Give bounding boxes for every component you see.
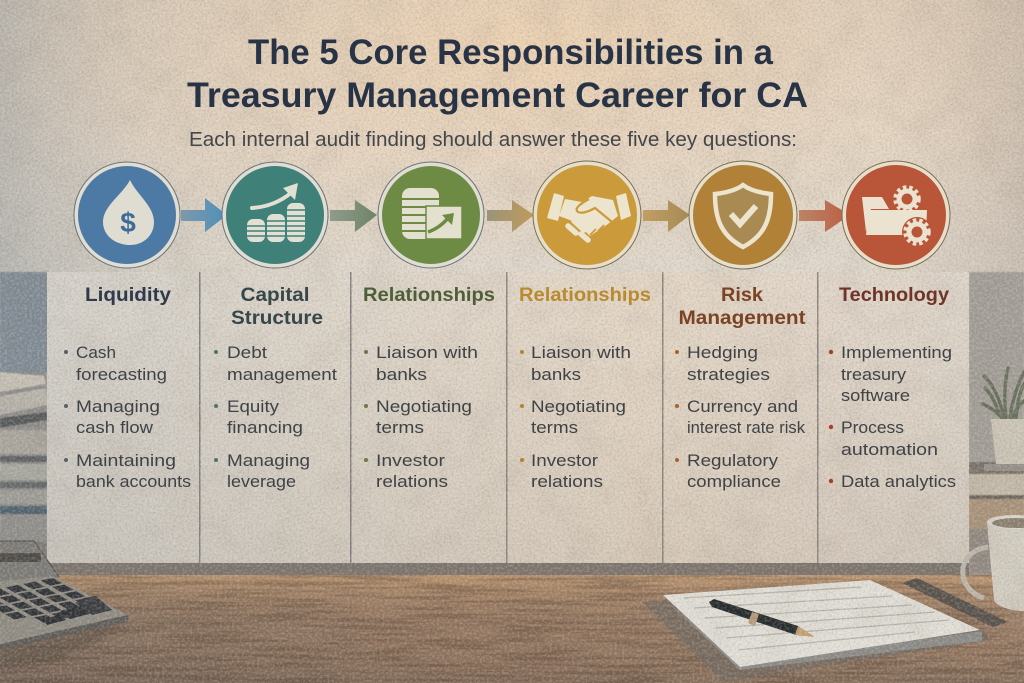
column: relationships green: Negotiating	[376, 397, 472, 416]
column: risk management: strategies	[687, 365, 770, 384]
document and pen	[642, 580, 990, 682]
title: The 5 Core Responsibilities in a	[248, 33, 774, 72]
column: relationships gold: Negotiating	[531, 397, 626, 416]
column: technology: Data analytics	[841, 472, 956, 491]
column: relationships gold	[519, 285, 651, 491]
desk	[0, 575, 1024, 683]
arrow 1	[181, 198, 227, 232]
column: relationships green: relations	[376, 472, 448, 491]
column: capital structure: Managing	[227, 451, 310, 470]
calculator keys	[0, 578, 108, 626]
icon: relationships coins and chart	[378, 162, 484, 268]
column: technology: Process	[841, 418, 904, 437]
column: relationships gold: Liaison with	[531, 343, 631, 362]
column: capital structure: financing	[227, 418, 303, 437]
column: capital structure: management	[227, 365, 337, 384]
column: liquidity: bank accounts	[76, 472, 191, 491]
title: Treasury Management Career for CA	[187, 76, 808, 115]
column: risk management: Regulatory	[687, 451, 779, 470]
left window area	[0, 272, 48, 374]
column: capital structure: Structure	[231, 308, 323, 329]
column: technology: software	[841, 386, 910, 405]
column: liquidity	[64, 285, 191, 491]
plant in pot	[983, 368, 1024, 471]
column: capital structure: Equity	[227, 397, 280, 416]
column: risk management: Hedging	[687, 343, 758, 362]
title	[187, 33, 808, 115]
column: relationships gold: Relationships	[519, 285, 651, 306]
column: relationships gold: banks	[531, 365, 581, 384]
column: relationships green: banks	[376, 365, 427, 384]
icon: capital structure coins	[222, 162, 328, 268]
column: risk management: Management	[678, 308, 806, 329]
column: technology: Technology	[839, 285, 949, 306]
column: risk management: Currency and	[687, 397, 798, 416]
column: capital structure: Debt	[227, 343, 267, 362]
column: relationships green: Relationships	[363, 285, 495, 306]
column: liquidity: Managing	[76, 397, 160, 416]
window and shelf at right	[969, 272, 1024, 575]
column: liquidity: Liquidity	[85, 285, 171, 306]
stack of papers at left	[0, 372, 47, 575]
column: liquidity: cash flow	[76, 418, 154, 437]
info panel	[47, 272, 969, 575]
arrow 5	[799, 200, 850, 232]
column: relationships green: Investor	[376, 451, 445, 470]
column: risk management	[675, 285, 806, 491]
column: capital structure: leverage	[227, 472, 296, 491]
arrow 3	[487, 200, 534, 232]
column: relationships gold: terms	[531, 418, 578, 437]
column: technology: Implementing	[841, 343, 952, 362]
icon: liquidity drop	[74, 162, 180, 268]
column: technology	[829, 285, 956, 491]
coffee mug	[963, 515, 1024, 611]
arrow 2	[330, 200, 377, 232]
column: relationships green: Liaison with	[376, 343, 478, 362]
column: relationships green: terms	[376, 418, 424, 437]
column: liquidity: Maintaining	[76, 451, 176, 470]
column: liquidity: forecasting	[76, 365, 167, 384]
icon: technology folder and gears	[842, 161, 950, 269]
icon: relationships handshake	[533, 161, 641, 269]
column: technology: treasury	[841, 365, 907, 384]
column: technology: automation	[841, 440, 938, 459]
pen	[709, 599, 815, 637]
icon: risk management shield	[689, 161, 797, 269]
column: risk management: compliance	[687, 472, 781, 491]
ruler	[902, 578, 1008, 627]
arrow 4	[643, 200, 690, 232]
subtitle: Each internal audit finding should answer these five key questions:	[189, 129, 797, 151]
column: relationships green	[363, 285, 495, 491]
calculator	[0, 541, 128, 668]
column: capital structure: Capital	[240, 285, 310, 306]
column: liquidity: Cash	[76, 343, 116, 362]
column: relationships gold: Investor	[531, 451, 598, 470]
column: risk management: interest rate risk	[687, 418, 805, 437]
column: risk management: Risk	[721, 285, 763, 306]
column: capital structure	[214, 285, 337, 491]
icon: liquidity drop: $	[120, 207, 136, 238]
column: relationships gold: relations	[531, 472, 603, 491]
